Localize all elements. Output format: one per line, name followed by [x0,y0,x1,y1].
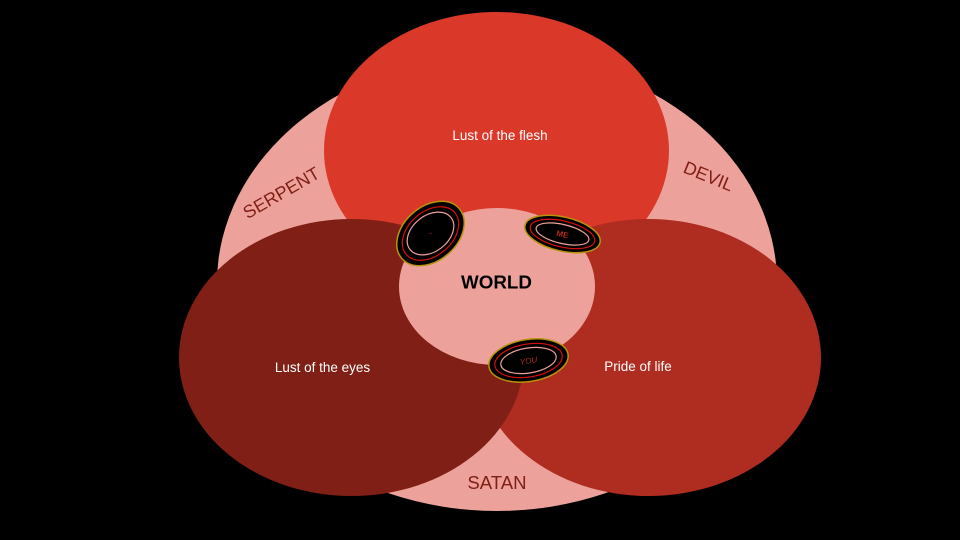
left ellipse: lust of the eyes [179,219,524,496]
label: pride of life: Pride of life [604,359,672,374]
badge: you [486,334,571,387]
label: world: WORLD [461,272,532,292]
badge: I [384,188,477,279]
center ellipse: world [399,208,595,365]
badge: me [521,209,604,259]
badge: you: YOU [519,355,538,367]
label: satan: SATAN [467,472,527,493]
right ellipse: pride of life [476,219,821,496]
top ellipse: lust of the flesh [324,12,669,289]
label: devil: DEVIL [681,157,736,195]
label: lust of the flesh: Lust of the flesh [452,128,548,143]
label: lust of the eyes: Lust of the eyes [275,360,370,375]
large outer ellipse [217,55,777,511]
badge: I: I [427,232,433,236]
badge: me: ME [556,229,570,240]
label: serpent: SERPENT [240,163,323,223]
